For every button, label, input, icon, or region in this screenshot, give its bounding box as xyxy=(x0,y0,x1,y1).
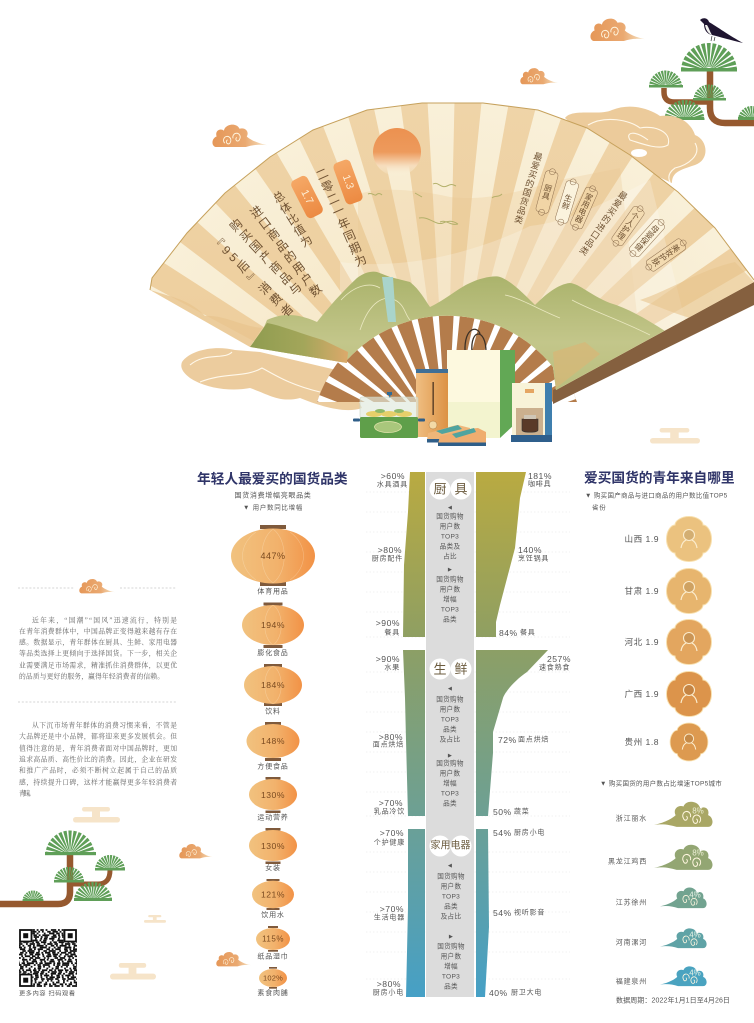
lantern: 纸品湿巾 115%: 纸品湿巾 xyxy=(257,952,289,960)
lantern: 体育用品 447%: 体育用品 xyxy=(257,586,289,596)
chart labels: right side growth: 257% xyxy=(547,654,571,664)
value pill: 1.7 xyxy=(289,174,325,220)
lantern: 饮料 184% xyxy=(244,664,302,716)
fan tag: 厨具: 厨具 xyxy=(540,183,553,202)
column label: 厨具: 品类 xyxy=(443,614,457,624)
chart labels: right side growth: 视听影音 xyxy=(514,908,545,916)
chart labels: left side share: >60% xyxy=(381,471,405,481)
chart labels: right side growth: 速食熟食 xyxy=(539,662,570,672)
lantern: 体育用品 447% xyxy=(231,525,315,596)
chart labels: right side growth: 72% xyxy=(498,735,517,745)
text block: paragraph two: 值得注意的是，青年消费者面对中国品牌时，更加 xyxy=(19,744,177,754)
column label: 生鲜: 品类 xyxy=(443,724,457,734)
fan tag: 个人护理 xyxy=(609,203,647,249)
chart labels: left side share: >80% xyxy=(378,545,402,555)
city: 浙江丽水 8% xyxy=(616,802,713,827)
column label: 厨具: ► xyxy=(447,566,453,574)
lantern: 方便食品 148% xyxy=(246,722,300,770)
chart labels: left side share: >70% xyxy=(380,904,404,914)
chart labels: left side share: >90% xyxy=(376,654,400,664)
lantern: 纸品湿巾 115%: 115% xyxy=(262,934,284,944)
city: 河南漯河 4% xyxy=(616,928,707,948)
column label: 家用电器: 家用电器 xyxy=(430,838,470,852)
chart labels: right side growth: 咖啡具 xyxy=(528,479,551,488)
column label: 生鲜: 鲜 xyxy=(454,662,468,676)
fan tag: 美妆护肤 xyxy=(643,236,689,274)
pine tree: lower left xyxy=(0,841,125,904)
fan text: left inscription: 进口商品的用户数 xyxy=(246,203,325,301)
lantern: 方便食品 148%: 148% xyxy=(261,736,285,746)
column label: 家用电器: ◄ xyxy=(447,862,453,870)
lantern: 饮料 184%: 饮料 xyxy=(265,706,281,716)
heading: where young buyers come from: 省份 xyxy=(592,502,606,512)
lantern: 女装 130% xyxy=(249,828,297,872)
city: 江苏徐州 4%: 江苏徐州 xyxy=(616,898,647,906)
cloud: top centre right xyxy=(590,19,645,41)
column label: 家用电器: TOP3 xyxy=(442,974,460,980)
lantern: 女装 130%: 女装 xyxy=(265,863,281,872)
fan text: left inscription: 二零二一年同期为 xyxy=(313,166,369,270)
fan text: right inscriptions: 最爱买的进口品类 xyxy=(577,188,629,257)
column label: 厨具: ◄ xyxy=(447,504,453,512)
column label: 生鲜: 国货购物 xyxy=(436,694,464,704)
illustration: coffee maker xyxy=(511,383,552,442)
lantern: 饮用水 121%: 饮用水 xyxy=(261,910,285,919)
column label: 厨具: 用户数 xyxy=(440,522,460,530)
column label: 生鲜: TOP3 xyxy=(441,716,459,724)
chart labels: left side share: >70% xyxy=(379,798,403,808)
tan cloud: behind fan lower left xyxy=(181,348,362,410)
column label: 厨具: 厨 xyxy=(433,482,447,496)
lantern: 素食肉脯 102% xyxy=(257,967,289,997)
lantern: 膨化食品 194% xyxy=(242,602,304,657)
chart labels: left side share: 餐具 xyxy=(384,628,400,636)
illustration: toaster xyxy=(416,369,448,437)
decor: pale stacked clouds xyxy=(73,428,700,979)
value pill: 1.3 xyxy=(332,158,364,206)
chart labels: right side growth: 54% xyxy=(493,908,512,918)
heading: where young buyers come from: 爱买国货的青年来自哪里 xyxy=(584,470,735,486)
column label: 家用电器: 及占比 xyxy=(441,912,461,920)
text block: paragraph one: 业需要满足市场需求，精准抓住消费群体，以更优 xyxy=(19,660,177,670)
province: 河北 1.9: 河北 1.9 xyxy=(624,636,659,647)
text block: paragraph two: 感，持续提升口碑，这样才能赢得更多年轻消费者 xyxy=(19,778,177,788)
province: 贵州 1.8 xyxy=(624,723,708,761)
fan tag: 生鲜 xyxy=(554,177,580,227)
city: 河南漯河 4%: 河南漯河 xyxy=(616,938,647,946)
city: 福建泉州 4%: 4% xyxy=(689,968,701,978)
city: 黑龙江鸡西 8%: 8% xyxy=(692,848,704,858)
column label: 厨具: 国货购物 xyxy=(436,574,464,584)
column label: 家用电器: 国货购物 xyxy=(437,872,465,880)
lantern: 饮用水 121%: 121% xyxy=(261,890,285,900)
text block: paragraph one: 在青年消费群体中，中国品牌正变得越来越有存在 xyxy=(19,626,177,636)
lantern: 素食肉脯 102%: 102% xyxy=(263,974,283,982)
text block: paragraph two: 追求高品质、高性价比的消费。因此，企业在研发 xyxy=(19,754,177,764)
chart labels: left side share: 水果 xyxy=(384,662,400,672)
text block: paragraph two: 大品牌还是中小品牌，都将迎来更多发展机会。但 xyxy=(19,732,177,742)
heading: category ranking: 年轻人最爱买的国货品类 xyxy=(197,470,348,486)
text block: paragraph two xyxy=(19,720,177,798)
text block: paragraph two: 和推广产品时，必须不断树立起属于自己的品质 xyxy=(19,766,177,776)
fan text: right inscriptions: 最爱买的国货品类 xyxy=(512,150,544,226)
chart labels: left side share: 面点烘焙 xyxy=(373,740,404,748)
column label: 厨具: 用户数 xyxy=(440,584,460,594)
chart labels: left side share: 个护健康 xyxy=(374,838,405,846)
city: 浙江丽水 8%: 8% xyxy=(692,806,704,816)
column label: 生鲜: 用户数 xyxy=(440,704,460,714)
cloud: small above fan xyxy=(520,68,558,84)
cloud: left of lantern 女装 xyxy=(179,844,213,858)
fan tag: 个人护理: 个人护理 xyxy=(615,210,641,242)
column label: 家用电器: 国货购物 xyxy=(437,942,465,950)
column label: 家用电器: 用户数 xyxy=(441,952,461,960)
column label: 生鲜: TOP3 xyxy=(441,790,459,798)
illustration: sneakers xyxy=(427,425,486,446)
data period note: 数据周期：2022年1月1日至4月26日 xyxy=(616,996,730,1004)
chart labels: left side share: >70% xyxy=(380,828,404,838)
fan tag: 美妆护肤: 美妆护肤 xyxy=(649,242,682,268)
heading: where young buyers come from xyxy=(584,470,735,512)
text block: paragraph two: 青睐。 xyxy=(19,788,35,798)
value pill: 1.7: 1.7 xyxy=(298,188,316,206)
fan: paper with stripes, sun, mist and hills xyxy=(150,102,754,390)
province: 山西 1.9: 山西 1.9 xyxy=(624,534,659,544)
chart: category column background xyxy=(426,472,474,997)
QR caption: 更多内容 扫码观看 xyxy=(19,990,76,998)
city: 河南漯河 4%: 4% xyxy=(689,930,701,940)
column label: 家用电器: TOP3 xyxy=(442,894,460,900)
fan tag: 生鲜: 生鲜 xyxy=(560,192,574,212)
text block: paragraph one xyxy=(19,616,177,682)
column label: 生鲜: 生 xyxy=(433,662,447,676)
QR code xyxy=(19,929,77,987)
fan tag: 母婴保健: 母婴保健 xyxy=(632,223,661,254)
province: 广西 1.9: 广西 1.9 xyxy=(624,688,659,699)
chart: 厨具 funnel bars xyxy=(403,472,526,637)
chart labels: left side share: 厨房小电 xyxy=(373,988,404,996)
fan: ribs and guard stick xyxy=(317,282,754,404)
fan text: left inscription: 总体比值为 xyxy=(269,188,315,251)
column label: 生鲜: 用户数 xyxy=(440,768,460,778)
lantern: 运动营养 130% xyxy=(249,777,297,822)
chart labels: right side growth: 84% xyxy=(499,628,518,638)
province: 山西 1.9 xyxy=(624,516,712,562)
city: 江苏徐州 4% xyxy=(616,887,707,908)
chart labels: right side growth: 40% xyxy=(489,988,508,998)
column label: 厨具: TOP3 xyxy=(441,534,459,540)
province: 广西 1.9 xyxy=(624,672,712,716)
chart: 生鲜 funnel bars xyxy=(403,650,548,816)
lantern: 纸品湿巾 115% xyxy=(256,926,290,960)
province: 河北 1.9 xyxy=(624,620,712,664)
fan tag: 厨具 xyxy=(535,167,559,217)
column label: 厨具: 具 xyxy=(454,482,468,496)
city: 浙江丽水 8%: 浙江丽水 xyxy=(616,814,647,822)
chart labels: right side growth: 50% xyxy=(493,807,512,817)
chart labels: right side growth: 181% xyxy=(528,471,552,481)
chart labels: right side growth: 厨房小电 xyxy=(514,828,545,836)
lantern: 膨化食品 194%: 194% xyxy=(261,620,285,630)
chart labels: left side share: 生活电器 xyxy=(374,912,405,922)
lantern: 运动营养 130%: 130% xyxy=(261,790,285,800)
lantern: 体育用品 447%: 447% xyxy=(260,551,286,561)
chart labels: right side growth: 蔬菜 xyxy=(514,806,530,816)
column label: 厨具: 品类及 xyxy=(440,542,460,550)
chart labels: left side share xyxy=(372,471,408,996)
text block: paragraph one: 的品质与更好的服务，赢得年轻消费者的信赖。 xyxy=(19,672,164,682)
value pill: 1.3: 1.3 xyxy=(340,173,356,191)
chart labels: left side share: >80% xyxy=(377,979,401,989)
column label: 生鲜: 及占比 xyxy=(440,734,460,744)
column label: 生鲜: ◄ xyxy=(447,686,453,692)
province: 甘肃 1.9: 甘肃 1.9 xyxy=(624,585,659,596)
chart labels: left side share: 水具酒具 xyxy=(377,480,408,488)
column label: 厨具: 国货购物 xyxy=(436,512,464,520)
chart labels: right side growth: 厨卫大电 xyxy=(511,988,542,996)
chart labels: right side growth xyxy=(489,471,571,998)
lantern: 饮用水 121% xyxy=(252,879,294,919)
column label: 厨具: TOP3 xyxy=(441,606,459,614)
column label: 生鲜 xyxy=(430,658,472,808)
icon: magpie bird xyxy=(700,18,743,43)
tan cloud: behind fan upper right xyxy=(565,107,706,183)
lantern: 方便食品 148%: 方便食品 xyxy=(257,762,289,770)
fan text: left inscription: 『95后』消费者 xyxy=(208,232,298,322)
chart labels: left side share: 乳品冷饮 xyxy=(374,806,405,816)
cloud: left of lantern 纸品湿巾 xyxy=(216,952,251,966)
column label: 家用电器: ► xyxy=(448,934,454,940)
lantern: 素食肉脯 102%: 素食肉脯 xyxy=(257,988,289,997)
subheading: cities: ▼ 购买国货的用户数占比增速TOP5城市 xyxy=(600,778,722,788)
cloud: top left of fan xyxy=(212,125,267,147)
fan text: left inscription xyxy=(208,166,369,322)
heading: where young buyers come from: ▼ 购买国产商品与进口商品的用户数比值TOP5 xyxy=(585,490,728,500)
province: 甘肃 1.9 xyxy=(624,568,712,614)
pine tree: top right xyxy=(649,55,754,123)
province: 贵州 1.8: 贵州 1.8 xyxy=(624,736,659,747)
lantern: 运动营养 130%: 运动营养 xyxy=(257,812,289,822)
column label: 家用电器: 用户数 xyxy=(441,882,461,890)
city: 黑龙江鸡西 8%: 黑龙江鸡西 xyxy=(608,856,647,866)
chart labels: right side growth: 烹饪锅具 xyxy=(518,554,549,562)
column label: 家用电器: 品类 xyxy=(444,982,458,990)
city: 福建泉州 4%: 福建泉州 xyxy=(616,976,647,986)
chart labels: right side growth: 面点烘焙 xyxy=(518,734,549,744)
fan text: right inscriptions xyxy=(512,150,629,257)
text block: paragraph one: 近年来，“国潮”“国风”迅速流行，特别是 xyxy=(32,616,177,626)
chart labels: right side growth: 餐具 xyxy=(520,628,536,636)
column label: 家用电器: 品类 xyxy=(444,902,458,910)
chart labels: right side growth: 54% xyxy=(493,828,512,838)
chart labels: left side share: >80% xyxy=(379,732,403,742)
city: 江苏徐州 4%: 4% xyxy=(689,890,701,900)
heading divider: cloud and dashes xyxy=(18,579,177,593)
chart labels: left side share: 厨房配件 xyxy=(372,554,403,562)
chart labels: right side growth: 140% xyxy=(518,545,542,555)
column label: 家用电器: 增幅 xyxy=(444,962,458,970)
lantern: 饮料 184%: 184% xyxy=(261,680,285,690)
column label: 生鲜: 增幅 xyxy=(443,778,457,788)
fan text: left inscription: 购买国产商品与 xyxy=(225,215,306,300)
lantern: 女装 130%: 130% xyxy=(261,841,285,851)
heading: category ranking: ▼ 用户数同比增幅 xyxy=(243,502,303,512)
column label: 家用电器 xyxy=(430,836,472,990)
column label: 生鲜: 国货购物 xyxy=(436,758,464,768)
lantern: 膨化食品 194%: 膨化食品 xyxy=(257,648,289,657)
illustration: shopping bag xyxy=(447,329,515,438)
fan tag: 母婴保健 xyxy=(626,216,668,260)
chart: 家用电器 funnel bars xyxy=(406,829,489,997)
column label: 生鲜: ► xyxy=(447,752,453,760)
column label: 厨具 xyxy=(430,478,472,624)
heading: category ranking xyxy=(197,470,348,512)
column label: 生鲜: 品类 xyxy=(443,798,457,808)
text block: paragraph two: 从下沉市场青年群体的消费习惯来看，不管是 xyxy=(32,720,177,730)
column label: 厨具: 占比 xyxy=(443,552,457,560)
chart labels: left side share: >90% xyxy=(376,618,400,628)
fan tag: 家用电器: 家用电器 xyxy=(573,191,595,225)
fan tag: 家用电器 xyxy=(568,183,600,233)
text block: paragraph one: 感。数据显示，青年群体在厨具、生鲜、家用电器 xyxy=(19,638,177,648)
text block: paragraph one: 等品类选择上更倾向于选择国货。下一步，相关企 xyxy=(19,648,177,658)
column label: 厨具: 增幅 xyxy=(443,594,457,604)
illustration: steamer xyxy=(353,392,425,438)
city: 黑龙江鸡西 8% xyxy=(608,845,713,870)
city: 福建泉州 4% xyxy=(616,966,707,986)
heading: category ranking: 国货消费增幅亮眼品类 xyxy=(234,490,312,500)
